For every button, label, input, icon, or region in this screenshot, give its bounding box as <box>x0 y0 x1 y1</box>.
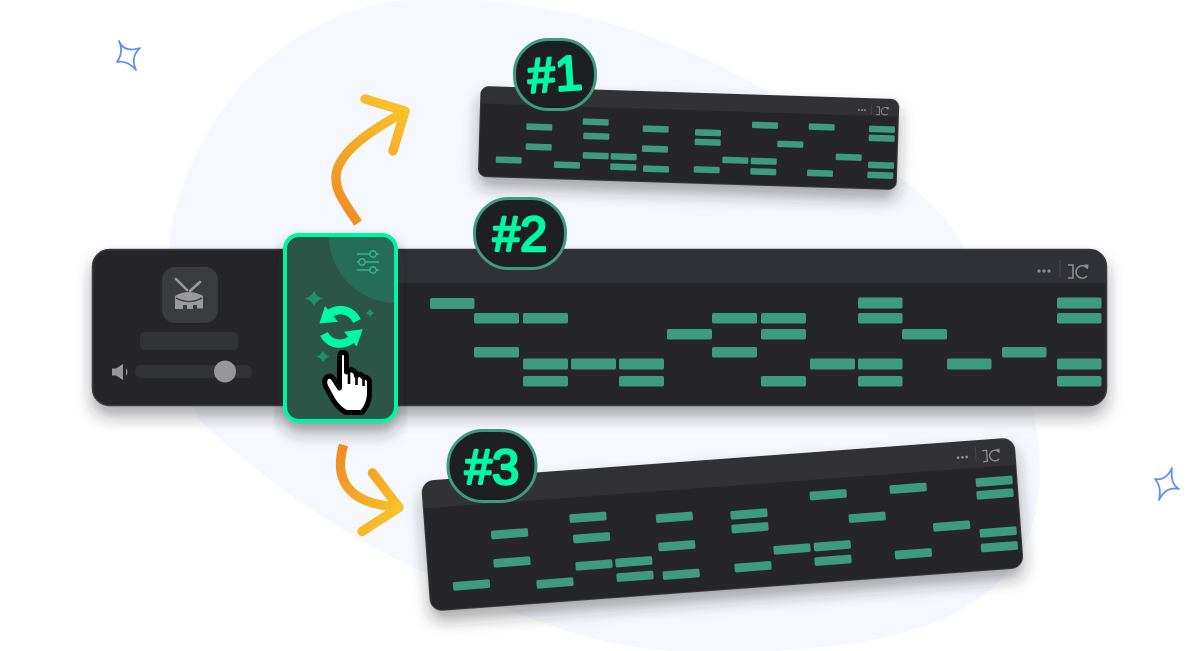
badge: #3 <box>448 430 536 502</box>
header controls <box>1037 260 1088 278</box>
badge: #1: #1 <box>526 46 584 104</box>
header controls <box>858 103 889 115</box>
header controls <box>956 445 1001 464</box>
background blob <box>168 0 1040 651</box>
instrument icon: drum <box>162 267 218 323</box>
icon: sliders <box>357 251 379 273</box>
arrow: up to variation 1 <box>336 99 405 223</box>
badge: #2 <box>474 198 566 268</box>
arrow: down to variation 3 <box>341 445 399 532</box>
card: regenerate button <box>274 232 408 444</box>
card corner highlight <box>329 237 394 303</box>
sparkles <box>305 290 374 362</box>
panel: main drum track <box>92 250 1106 406</box>
note bars <box>430 298 1102 386</box>
icon: refresh arrows <box>319 306 363 346</box>
panel: variation 1 <box>478 86 899 190</box>
instrument name placeholder <box>140 332 238 350</box>
icon: blue sparkle left <box>117 41 140 70</box>
volume slider <box>135 360 252 382</box>
note bars <box>453 476 1018 591</box>
icon: blue sparkle right <box>1155 468 1179 500</box>
icon: speaker <box>112 364 128 380</box>
icon: pointing hand <box>325 352 370 412</box>
badge: #2: #2 <box>493 208 547 262</box>
note bars <box>496 118 895 179</box>
panel: variation 3 <box>421 438 1023 611</box>
track header bar <box>398 250 1106 283</box>
badge: #1 <box>514 40 596 110</box>
badge: #3: #3 <box>465 441 519 495</box>
